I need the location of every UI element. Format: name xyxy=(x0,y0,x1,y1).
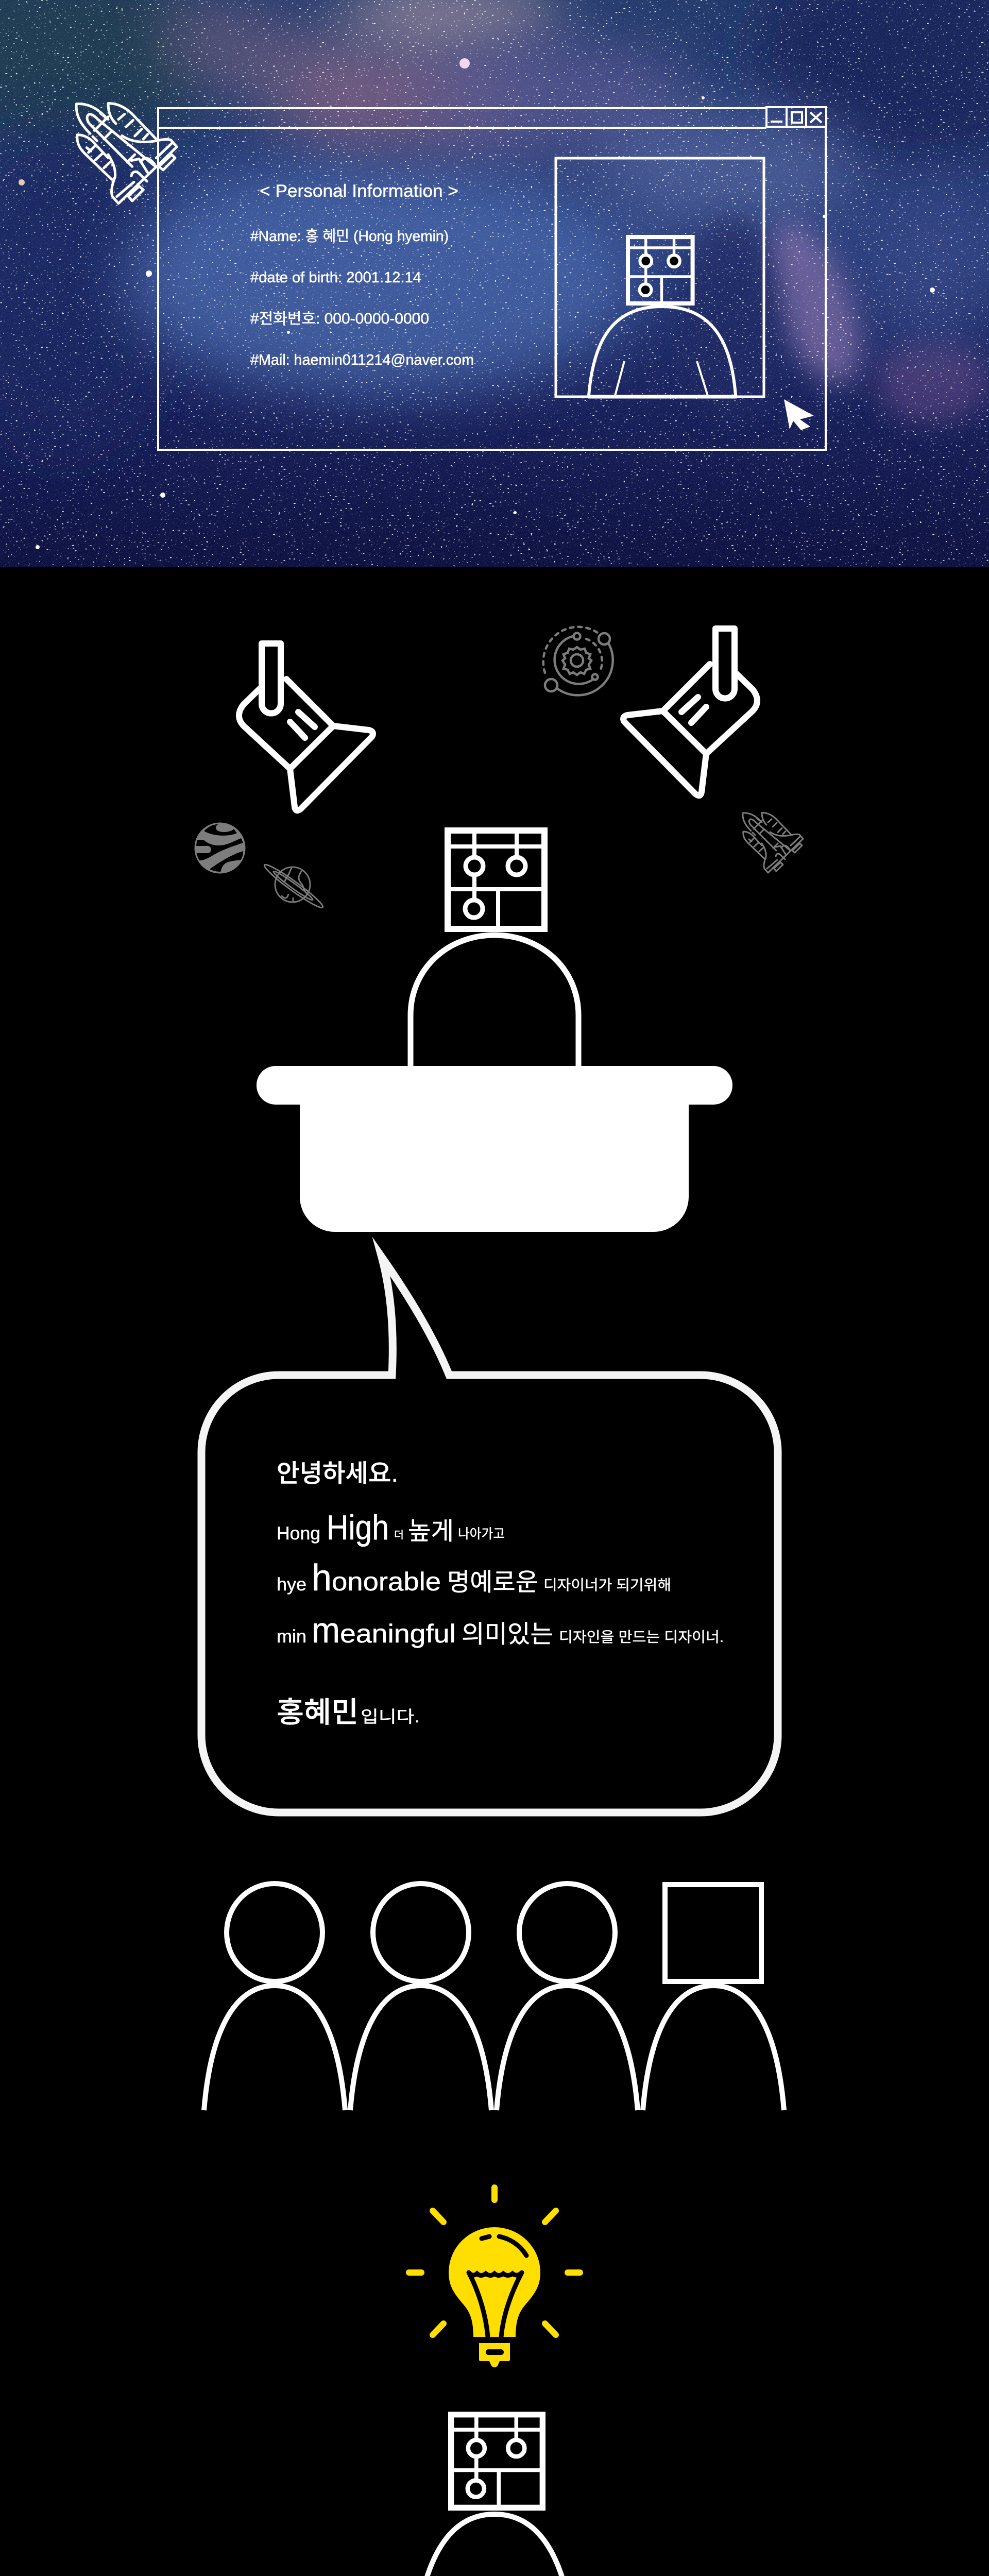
text: min meaning: min xyxy=(277,1626,306,1647)
icon: gray shuttle xyxy=(743,812,803,873)
text: personal details: #전화번호: 000-0000-0000 xyxy=(250,311,429,327)
icon: yellow light bulb xyxy=(409,2188,580,2367)
character body xyxy=(411,935,578,1066)
character body xyxy=(414,2514,575,2576)
text: hye meaning: 명예로운 xyxy=(447,1569,538,1596)
bulb rays xyxy=(409,2188,580,2335)
text: hye meaning: hye xyxy=(277,1574,306,1595)
text: Hong meaning: 나아가고 xyxy=(458,1526,505,1541)
panel: speech bubble introduction xyxy=(201,1257,778,1812)
text: name: 홍혜민 xyxy=(277,1696,359,1728)
text: hye meaning: onorable xyxy=(332,1567,441,1596)
text: hye meaning xyxy=(277,1557,671,1599)
text: personal details: #Mail: haemin011214@naver.com xyxy=(250,352,474,368)
panel: audience of four people xyxy=(204,1884,784,2110)
text: min meaning: eaningful xyxy=(340,1619,456,1648)
text: min meaning: 디자인을 만드는 디자이너. xyxy=(559,1629,724,1645)
person 1 xyxy=(204,1884,345,2110)
icon: striped planet xyxy=(195,823,245,873)
heading: personal information: < Personal Information > xyxy=(260,181,458,201)
text: hye meaning: 디자이너가 되기위해 xyxy=(543,1577,671,1593)
icon: solar system xyxy=(543,627,613,695)
window frame xyxy=(158,107,826,450)
text: Hong meaning: 더 xyxy=(394,1529,404,1541)
person 4 with square head xyxy=(643,1885,784,2110)
panel: creative designer idea xyxy=(193,2188,827,2576)
text: personal details xyxy=(250,228,474,368)
text: hye meaning: h xyxy=(312,1557,332,1599)
character head xyxy=(451,2415,542,2507)
text: min meaning: 의미있는 xyxy=(462,1621,553,1648)
person 2 xyxy=(350,1884,491,2110)
icon: ringed planet xyxy=(262,861,326,911)
portrait frame with character xyxy=(556,158,764,397)
icon: right stage light xyxy=(623,629,757,795)
text: Hong meaning: 높게 xyxy=(408,1518,454,1545)
person 3 xyxy=(497,1884,638,2110)
text: personal details: #Name: 홍 혜민 (Hong hyemin) xyxy=(250,228,449,245)
text: name: 입니다. xyxy=(361,1707,420,1726)
starry galaxy background xyxy=(0,0,989,567)
character head xyxy=(448,831,544,929)
text: Hong meaning: High xyxy=(327,1508,389,1547)
text: greeting: 안녕하세요. xyxy=(277,1460,398,1487)
panel: hero starry background with personal information window xyxy=(0,0,989,567)
icon: mouse cursor xyxy=(784,399,814,430)
text: name xyxy=(277,1696,420,1728)
speech bubble outline xyxy=(201,1257,778,1812)
bulb base xyxy=(479,2343,510,2367)
icon: space shuttle xyxy=(76,104,177,204)
bulb filament and highlights xyxy=(469,2236,526,2337)
text: Hong meaning xyxy=(277,1508,505,1547)
text: min meaning xyxy=(277,1610,724,1650)
podium xyxy=(257,1066,732,1232)
text: Hong meaning: Hong xyxy=(277,1523,320,1544)
bulb glass xyxy=(449,2227,540,2337)
text: min meaning: m xyxy=(312,1610,340,1650)
icon: left stage light xyxy=(239,643,373,810)
panel: presenter on stage xyxy=(195,627,803,1232)
text: personal details: #date of birth: 2001.12.14 xyxy=(250,269,421,286)
